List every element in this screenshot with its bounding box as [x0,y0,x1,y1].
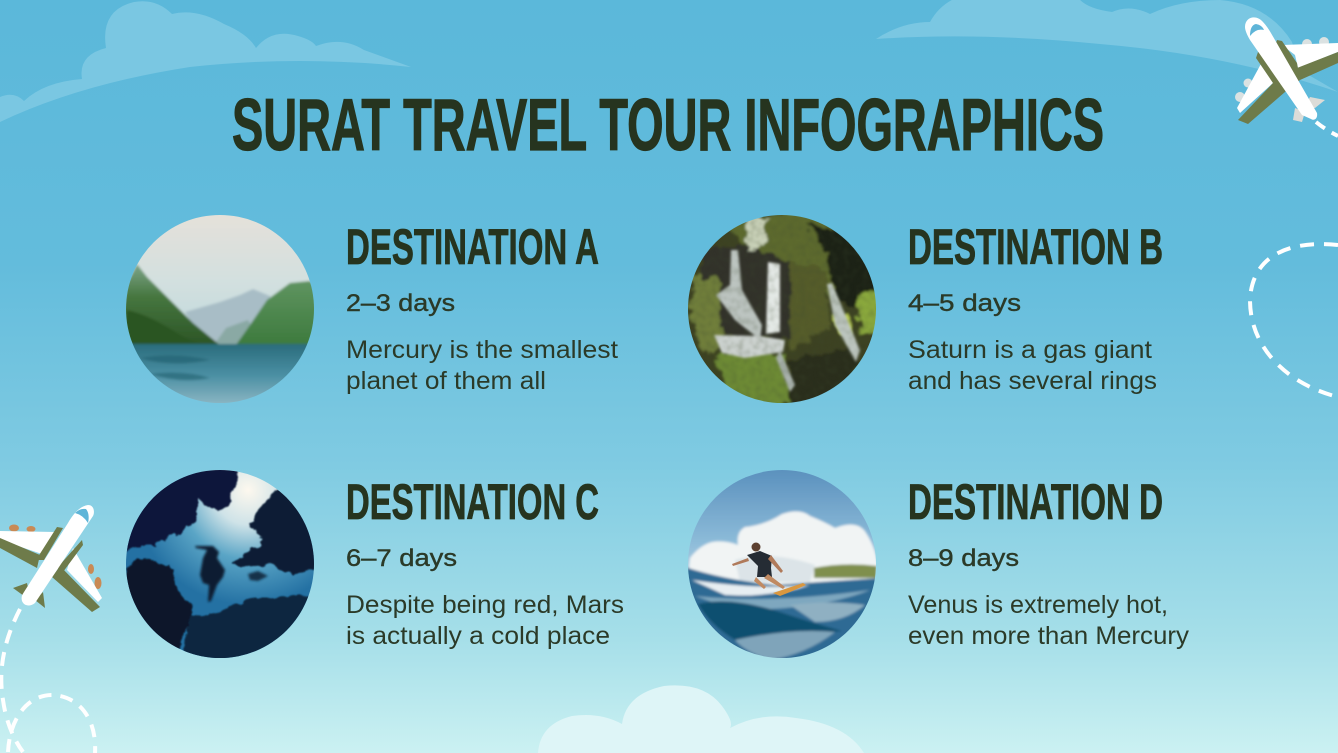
photo: waterfall [688,215,876,403]
duration: 8–9 days [908,545,1019,572]
dashed route: top right plane trail [1316,122,1338,136]
duration: 6–7 days [346,545,457,572]
dashed route: right [1250,244,1338,397]
heading: DESTINATION B [908,219,1163,275]
icon: airplane top right [1235,17,1338,124]
heading: DESTINATION C [346,474,599,530]
duration: 2–3 days [346,290,455,317]
duration: 4–5 days [908,290,1021,317]
panel: destination C [120,465,624,665]
description: Venus is extremely hot, [908,591,1168,619]
photo: underwater cave diver [126,470,314,658]
icon: airplane bottom left [0,505,102,612]
description: is actually a cold place [346,622,610,650]
heading: DESTINATION D [908,474,1163,530]
description: Saturn is a gas giant [908,336,1152,364]
photo: surfer [685,468,880,662]
panel: destination D [685,468,1190,662]
heading: DESTINATION A [346,219,599,275]
description: and has several rings [908,367,1157,395]
panel: destination B [688,215,1162,403]
description: Mercury is the smallest [346,336,618,364]
photo: mountain lake [120,210,320,406]
cloud: top right [876,0,1338,92]
panel: destination A [120,210,618,406]
description: planet of them all [346,367,546,395]
dashed route: bottom left trail [1,609,23,752]
dashed route: bottom left loop [8,695,95,753]
description: even more than Mercury [908,622,1190,650]
cloud: top left [0,1,411,122]
description: Despite being red, Mars [346,591,624,619]
cloud: bottom center [538,685,864,753]
